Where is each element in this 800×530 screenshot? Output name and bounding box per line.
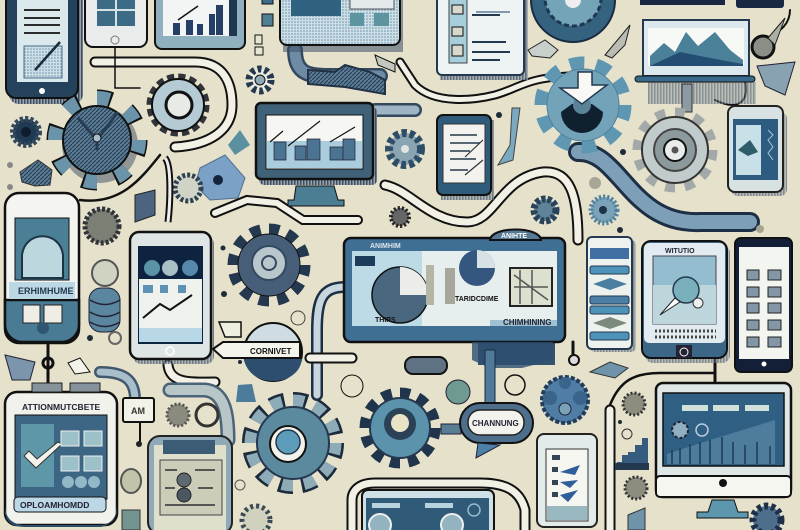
dashboard panel: ANIMHIM xyxy=(370,243,401,250)
tablet: right xyxy=(728,106,787,196)
doodle: coin column xyxy=(121,404,218,530)
dashboard panel: CHIMHINING xyxy=(503,318,551,327)
tablet: circuit xyxy=(148,436,232,530)
gear: silver xyxy=(150,77,206,133)
monitor: analytics xyxy=(656,383,791,518)
pipe segment: grey connector xyxy=(308,55,395,94)
icon: lens and leaf right xyxy=(752,18,795,95)
monitor: line and bar chart xyxy=(256,103,377,206)
small squares: top xyxy=(255,0,273,55)
chart card: top xyxy=(155,0,245,49)
gears and bars near monitor xyxy=(615,393,649,530)
icon: cloud tag xyxy=(68,358,90,374)
label: channeling bubble: CHANNUNG xyxy=(472,419,519,428)
dot doodles xyxy=(87,112,764,424)
list panel xyxy=(569,237,636,365)
gear: big dark xyxy=(56,99,138,183)
phone: top left document xyxy=(6,0,83,104)
small doodles xyxy=(109,311,363,502)
gear: small on pipe xyxy=(249,69,271,91)
phone: left gauge: ERHIMHUME xyxy=(18,286,74,296)
dashboard panel: ANIHTE xyxy=(501,233,527,240)
label: AM: AM xyxy=(131,406,145,416)
label: connect sphere xyxy=(213,323,302,381)
phone: right checklist xyxy=(735,238,792,372)
control panel device: top xyxy=(280,0,403,52)
gear: download arrow xyxy=(542,64,624,146)
small gears mid right xyxy=(391,177,617,226)
dashboard panel: TARIDCDIME xyxy=(455,296,499,303)
gear: large teal xyxy=(251,401,335,485)
automate card: OPLOAMHOMDD xyxy=(20,500,89,510)
document tablet xyxy=(437,115,494,200)
stack of discs xyxy=(89,260,120,332)
bottom dashboard device xyxy=(362,490,494,530)
gear: blue left of document xyxy=(389,108,520,165)
fish shaped pointer xyxy=(528,25,630,58)
label: AM xyxy=(123,398,154,447)
blue blob gear cluster xyxy=(135,130,250,222)
wheel: top xyxy=(531,0,615,42)
leaf icon left xyxy=(5,355,35,380)
gear: small dark left xyxy=(13,119,39,145)
gear: silver large xyxy=(639,114,711,186)
tablet: magnifier xyxy=(642,241,730,363)
label: connect sphere: CORNIVET xyxy=(250,347,291,356)
phone: left gauge xyxy=(5,193,79,368)
tablet: top left xyxy=(85,0,147,47)
tablet: checklist bottom xyxy=(537,434,597,527)
doodle: cluster left xyxy=(7,160,52,190)
gear: teal center bottom xyxy=(366,394,461,462)
tablet: magnifier: WITUTIO xyxy=(665,248,695,255)
capsule under dashboard xyxy=(405,342,553,438)
dashboard panel: THIPS xyxy=(375,317,396,324)
top right bar device xyxy=(640,0,784,8)
label: channeling bubble xyxy=(460,403,533,458)
gear: dark center xyxy=(234,230,304,300)
automate card: ATTIONMUTCBETE xyxy=(22,402,101,412)
monitor: mountain chart xyxy=(635,20,756,112)
phone: chart xyxy=(130,232,214,364)
checklist panel xyxy=(437,0,528,80)
blue round cog xyxy=(542,362,628,423)
gear: bottom edge xyxy=(242,506,781,530)
gear: dark doodle under pipe xyxy=(85,209,119,243)
dashboard panel xyxy=(344,230,565,365)
automate card xyxy=(5,383,117,527)
